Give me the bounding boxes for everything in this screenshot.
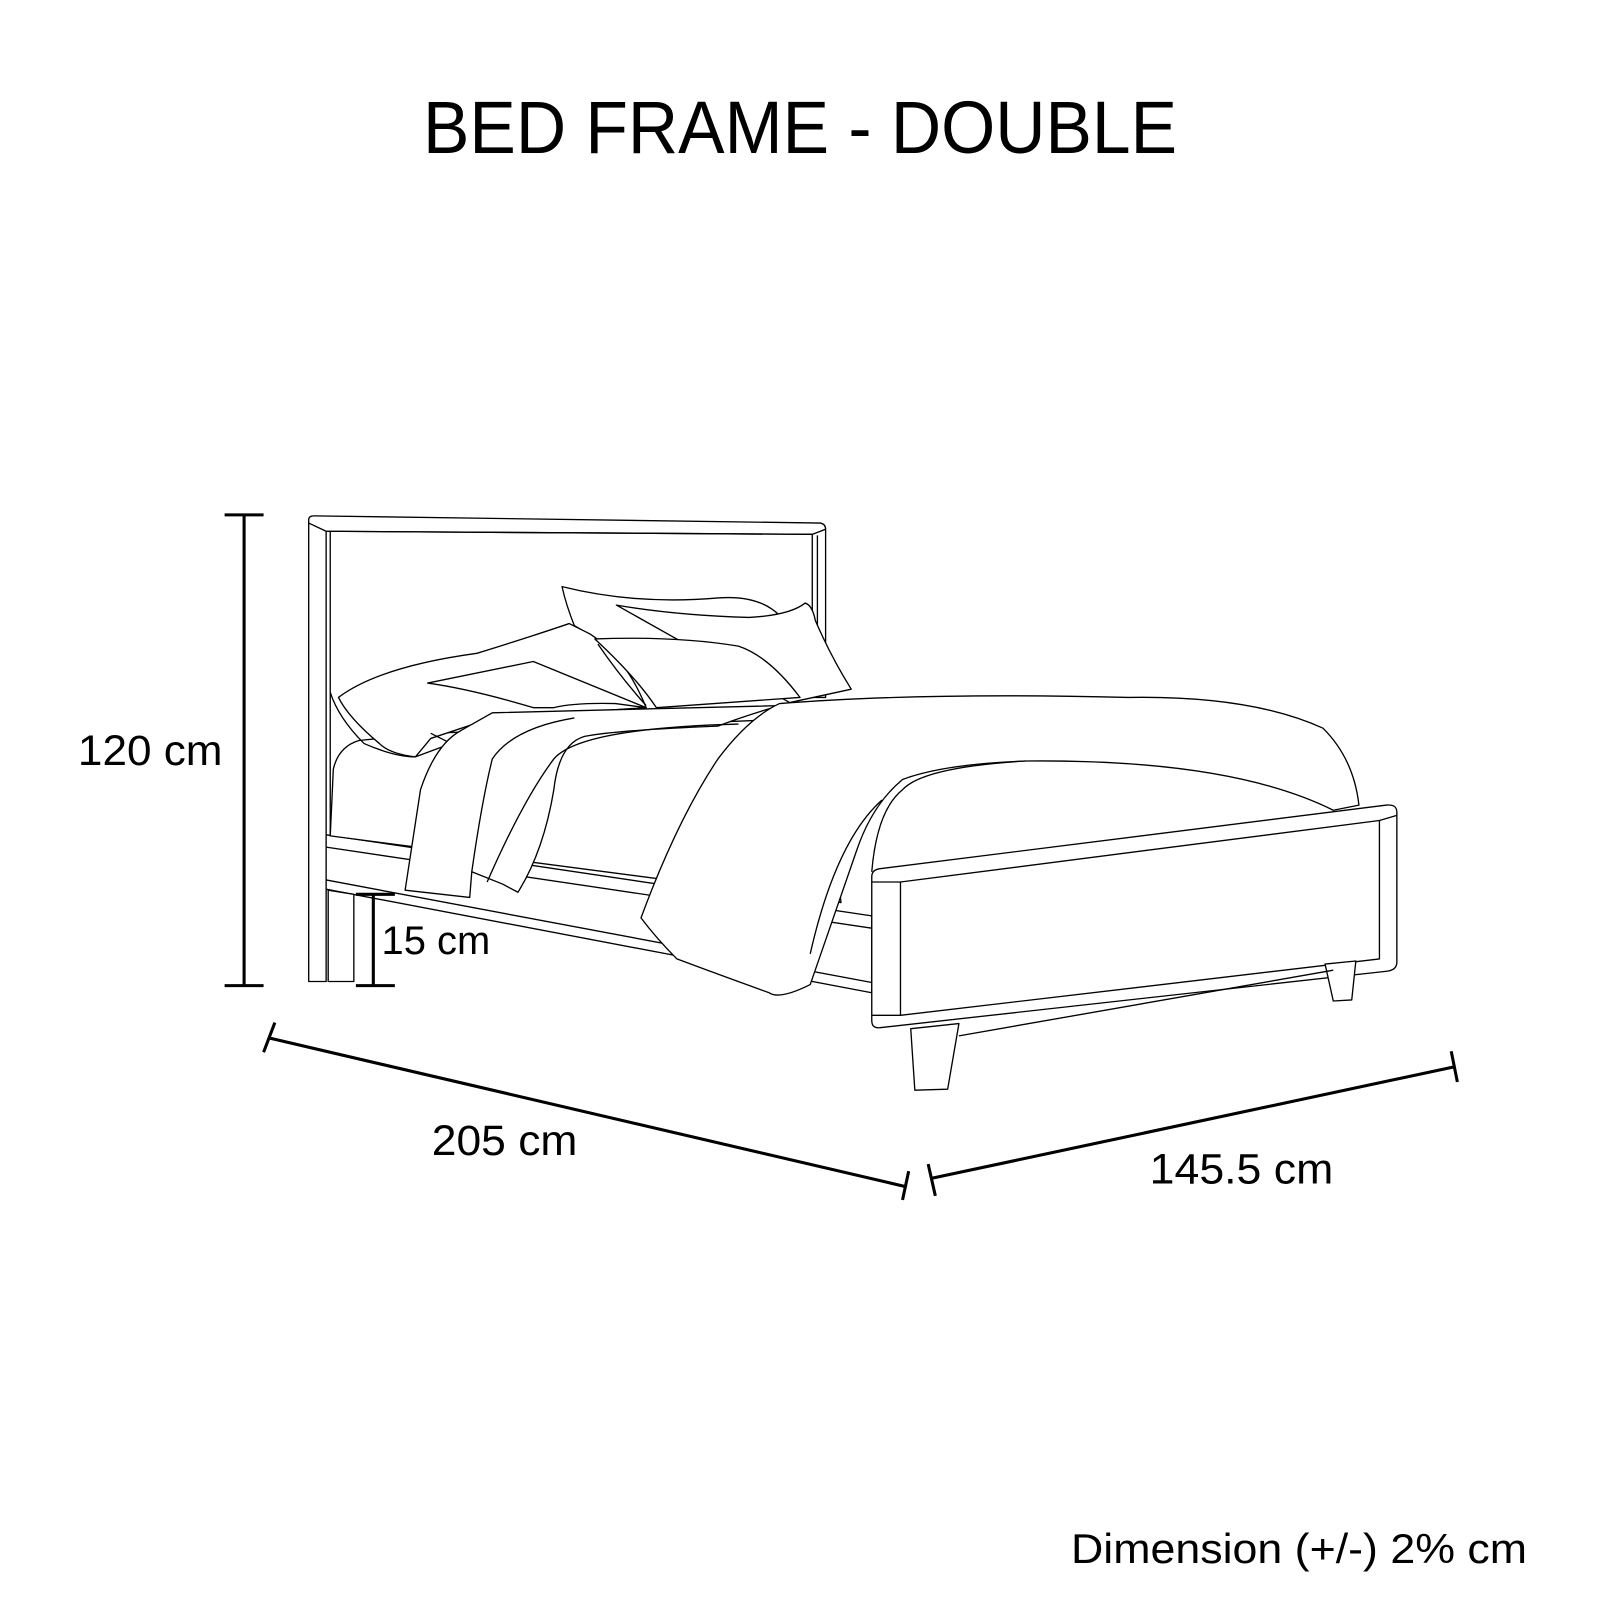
footnote: Dimension (+/-) 2% cm xyxy=(1071,1525,1527,1572)
pillows xyxy=(330,587,851,757)
dimension: height 120 cm xyxy=(225,515,264,986)
bed drawing xyxy=(309,516,1397,1090)
duvet xyxy=(641,696,1359,995)
label: 15 cm: 15 cm xyxy=(382,919,490,963)
label: 145.5 cm: 145.5 cm xyxy=(1150,1146,1333,1194)
dimension: width 145.5 cm xyxy=(928,1051,1457,1196)
footboard xyxy=(872,805,1397,1090)
label: 205 cm: 205 cm xyxy=(432,1117,577,1165)
label: 120 cm: 120 cm xyxy=(78,727,223,775)
dimension: leg 15 cm xyxy=(356,894,395,986)
mattress xyxy=(330,718,841,903)
sheet fold left xyxy=(405,706,779,897)
headboard xyxy=(309,516,826,981)
side rail xyxy=(326,835,872,993)
title: BED FRAME - DOUBLE xyxy=(423,86,1177,169)
dimension: length 205 cm xyxy=(264,1023,909,1200)
